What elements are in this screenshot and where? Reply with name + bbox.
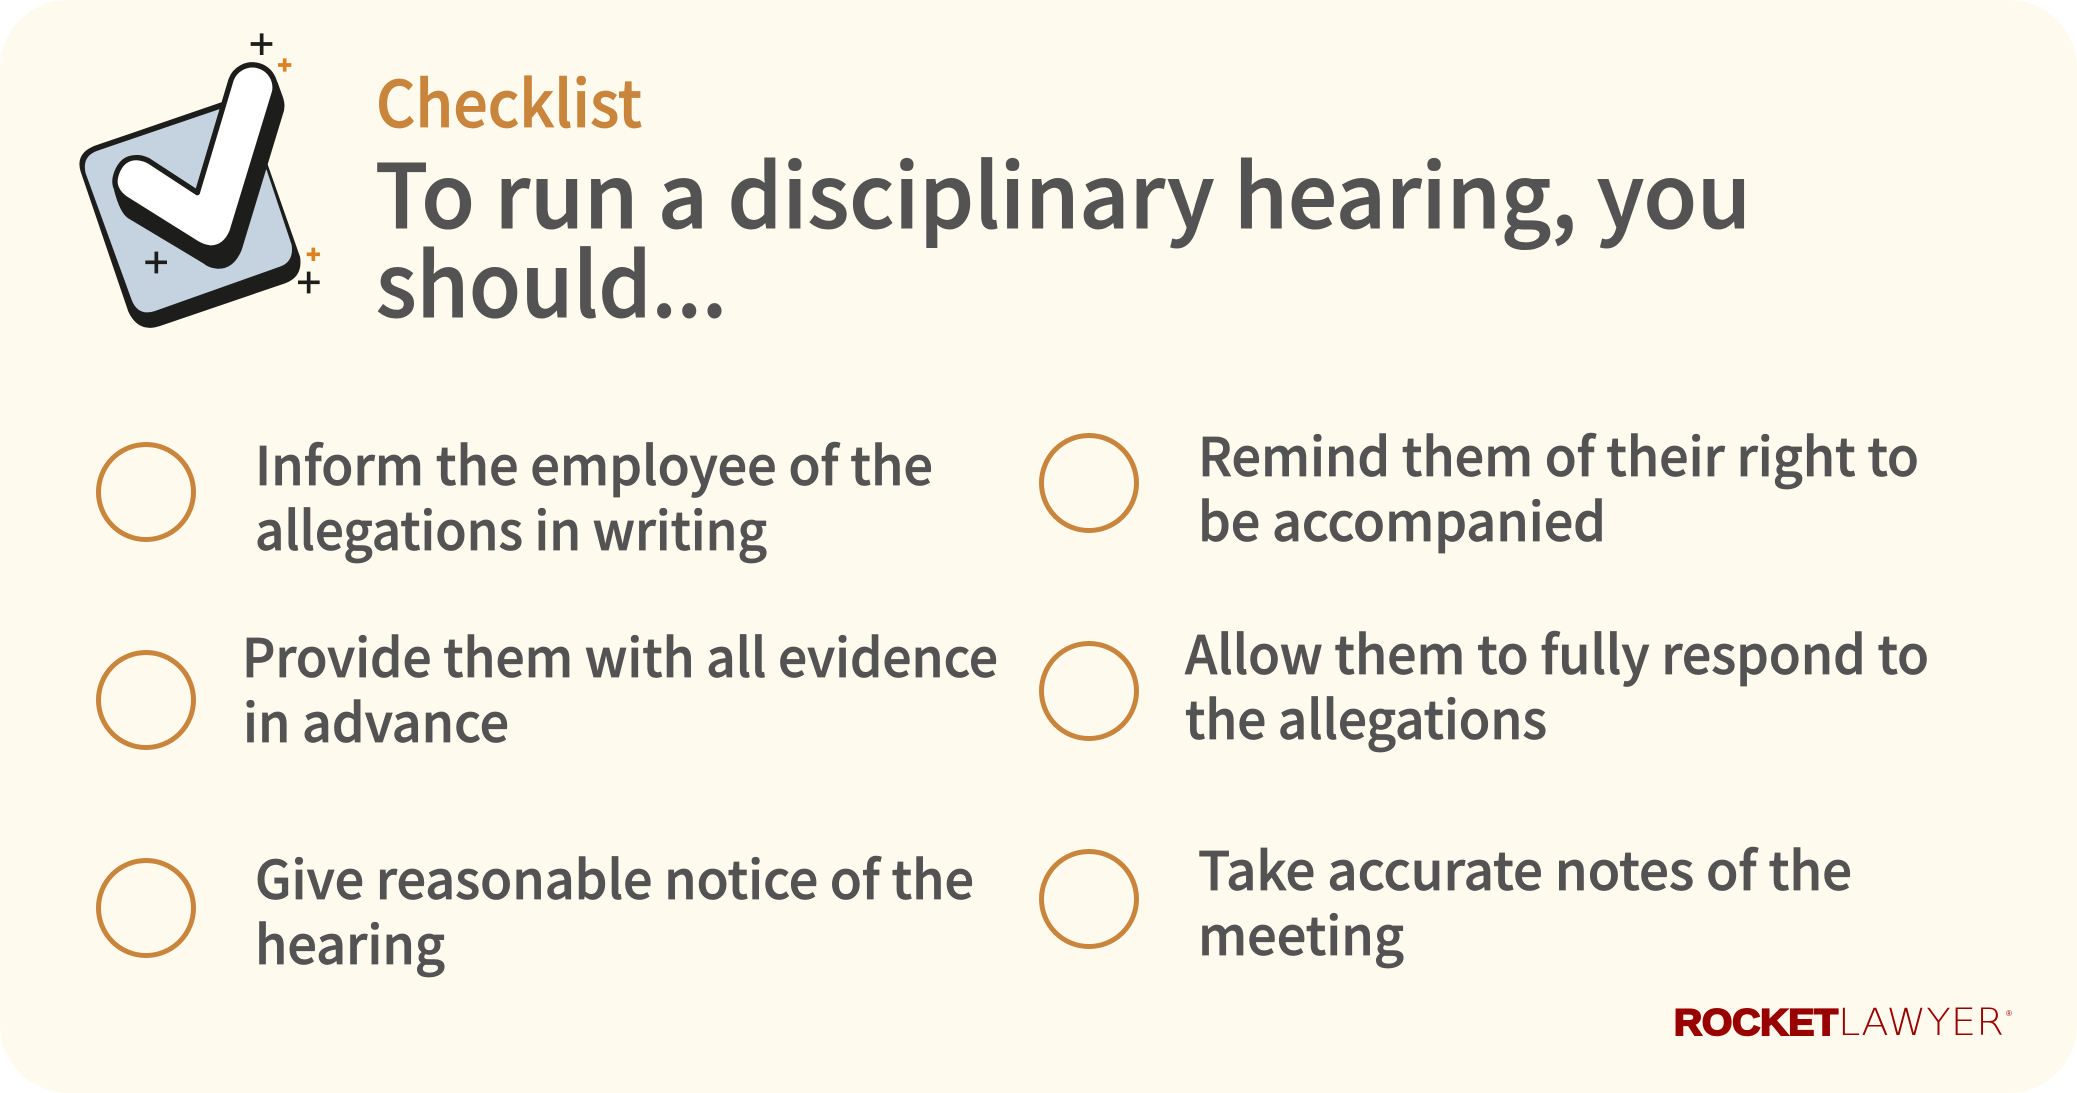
icon: tick xyxy=(115,65,275,248)
checklist item: respond xyxy=(1042,614,1929,755)
logo: Rocket Lawyer: ® xyxy=(2006,1009,2012,1018)
logo: Rocket Lawyer xyxy=(1674,1001,2012,1044)
checklist item: accompanied: be accompanied xyxy=(1198,481,1606,557)
checklist item: inform: allegations in writing xyxy=(255,490,767,566)
heading xyxy=(375,127,1751,343)
icon: sparkles xyxy=(145,33,320,293)
logo: Rocket Lawyer: ROCKET xyxy=(1674,1002,1838,1043)
checklist item: evidence: in advance xyxy=(243,682,509,758)
logo: Rocket Lawyer: LAWYER xyxy=(1838,1001,2004,1044)
checklist item: notes: Take accurate notes of the xyxy=(1198,830,1852,906)
icon: checkbox with tick xyxy=(79,33,320,328)
checklist item: evidence xyxy=(98,617,998,758)
icon: box shadow and outline xyxy=(79,102,301,328)
icon: box face xyxy=(85,108,292,312)
checklist item: accompanied: Remind them of their right to xyxy=(1198,416,1919,492)
checklist item: notes xyxy=(1042,830,1852,971)
icon: tick shadow xyxy=(114,82,285,269)
checklist item: respond: the allegations xyxy=(1185,679,1547,755)
checklist item: notice xyxy=(98,839,974,980)
checklist item: accompanied xyxy=(1042,416,1919,557)
checklist item: inform xyxy=(98,425,933,566)
checklist item: respond: Allow them to fully respond to xyxy=(1185,614,1929,690)
heading: should... xyxy=(376,216,727,343)
heading: To run a disciplinary hearing, you xyxy=(375,127,1751,254)
checklist item: inform: Inform the employee of the xyxy=(255,425,933,501)
checklist item: notice: hearing xyxy=(255,904,445,980)
eyebrow: Checklist: Checklist xyxy=(376,54,642,146)
checklist item: notes: meeting xyxy=(1198,895,1404,971)
checklist item: notice: Give reasonable notice of the xyxy=(255,839,974,915)
checklist item: evidence: Provide them with all evidence xyxy=(242,617,998,693)
